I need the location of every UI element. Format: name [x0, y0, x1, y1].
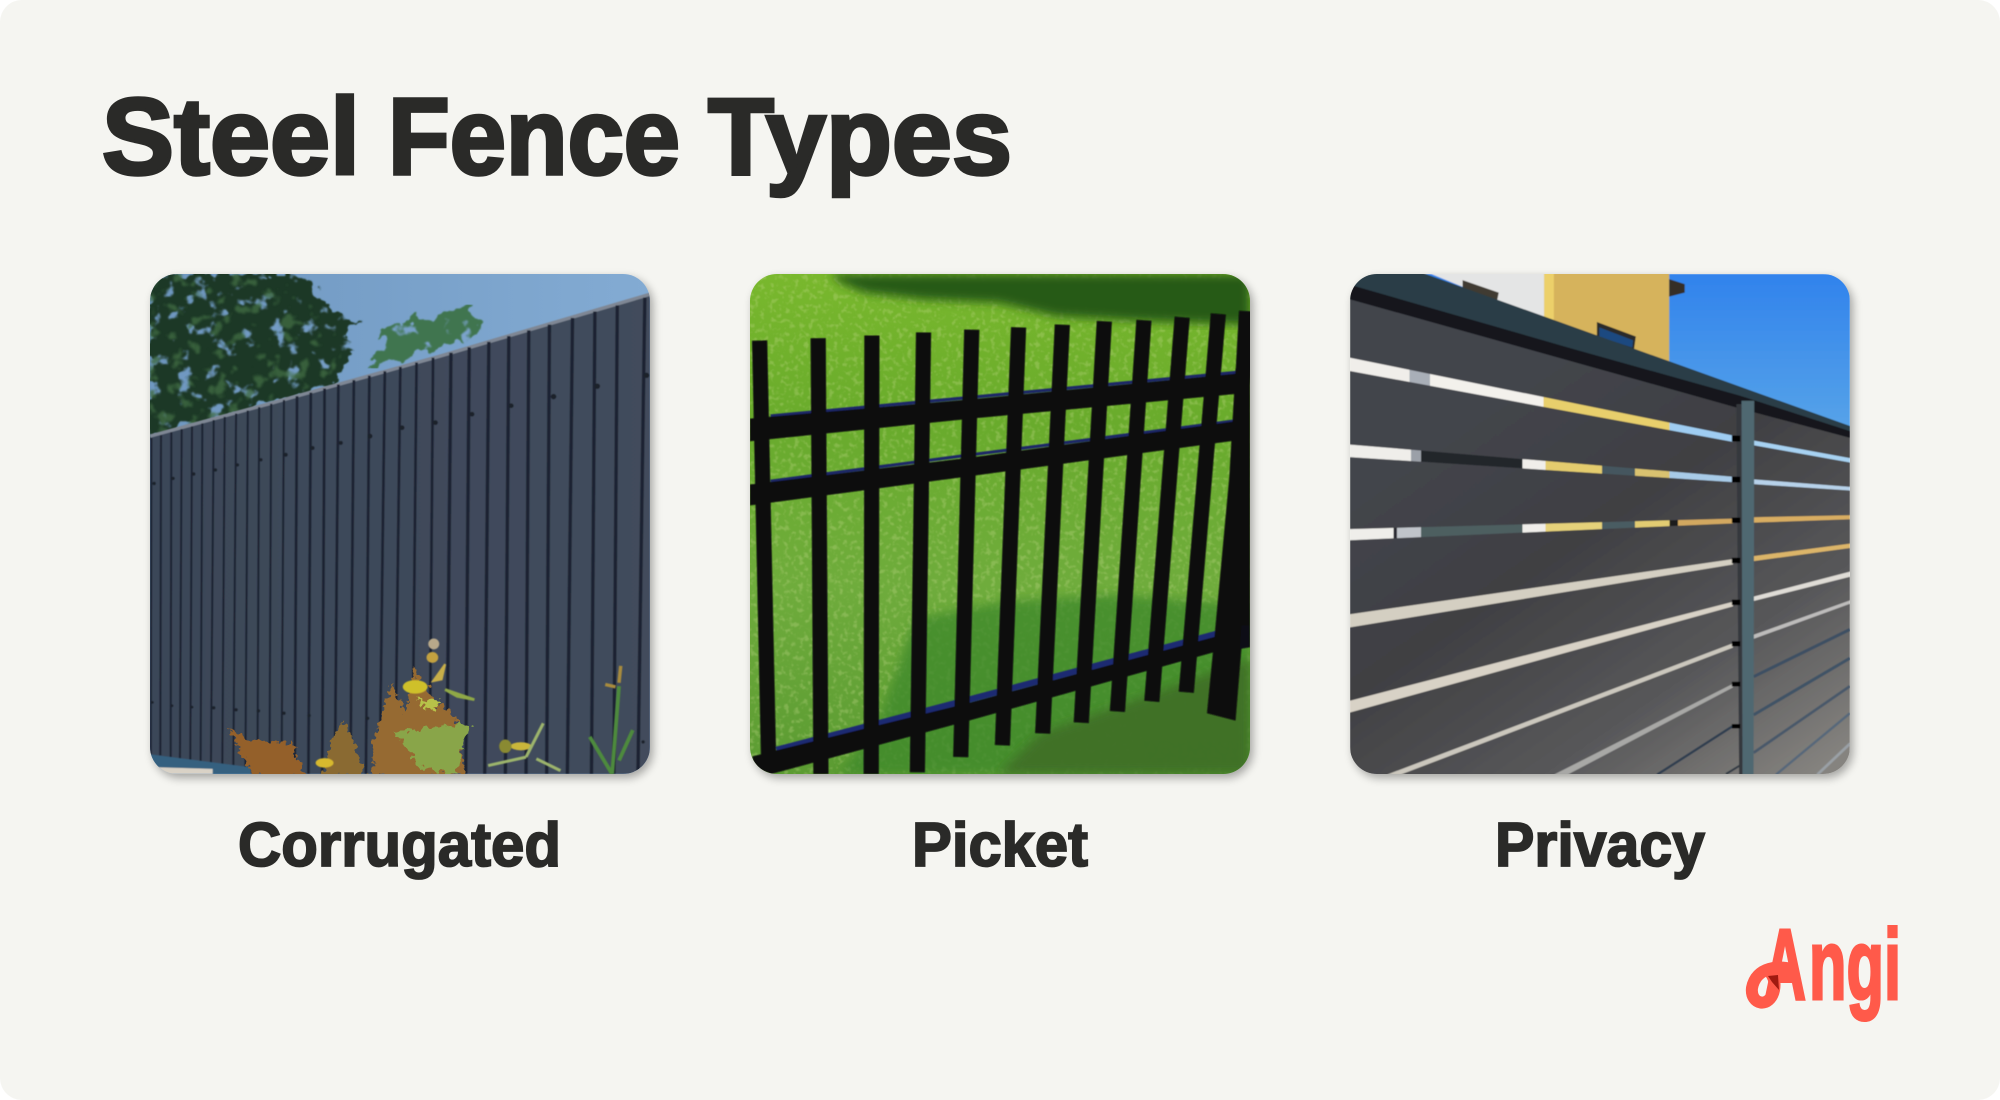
label: corrugated: Corrugated: [238, 811, 561, 880]
wall lamp: [1669, 279, 1685, 297]
yellow building: [1544, 271, 1669, 362]
photo: corrugated steel fence: [150, 274, 650, 774]
fence bolts: [151, 373, 649, 744]
title: Steel: [102, 76, 360, 198]
grass speckle: [750, 274, 1250, 774]
top rail: [750, 373, 1243, 441]
large tree: [150, 274, 361, 434]
corrugation ribs: [151, 298, 645, 774]
white building: [1423, 271, 1547, 321]
small tree: [371, 308, 485, 365]
logo: Angi: A: [1764, 909, 1806, 1021]
right post: [1207, 369, 1250, 721]
flowers and leaves: [316, 639, 633, 774]
title: [102, 76, 1012, 198]
title: Types: [708, 76, 1012, 198]
label: picket: Picket: [912, 811, 1088, 880]
fence post: [1736, 404, 1743, 775]
ground strip: [150, 754, 251, 774]
top cap: [1347, 271, 1850, 434]
plants: [228, 669, 471, 776]
middle rail: [750, 420, 1243, 505]
post fasteners: [1732, 435, 1740, 728]
fence: [750, 311, 1250, 774]
pickets: [760, 311, 1247, 774]
logo: Angi: ngi: [1809, 909, 1901, 1021]
lower shade on grass: [840, 595, 1250, 774]
blue sky: [1350, 274, 1850, 443]
tree shadow on grass: [830, 274, 1250, 325]
slat gaps: [1350, 358, 1733, 442]
fence panels: [1350, 296, 1850, 777]
title: Fence: [388, 76, 680, 198]
photo: privacy steel fence: [1350, 274, 1850, 774]
fence top cap: [150, 294, 650, 436]
label: privacy: Privacy: [1495, 811, 1705, 880]
logo: Angi: [1752, 909, 1901, 1021]
rail highlights: [771, 372, 1240, 481]
bottom rail: [752, 635, 1222, 774]
fence wall: [150, 294, 650, 774]
photo: picket steel fence: [750, 274, 1250, 774]
